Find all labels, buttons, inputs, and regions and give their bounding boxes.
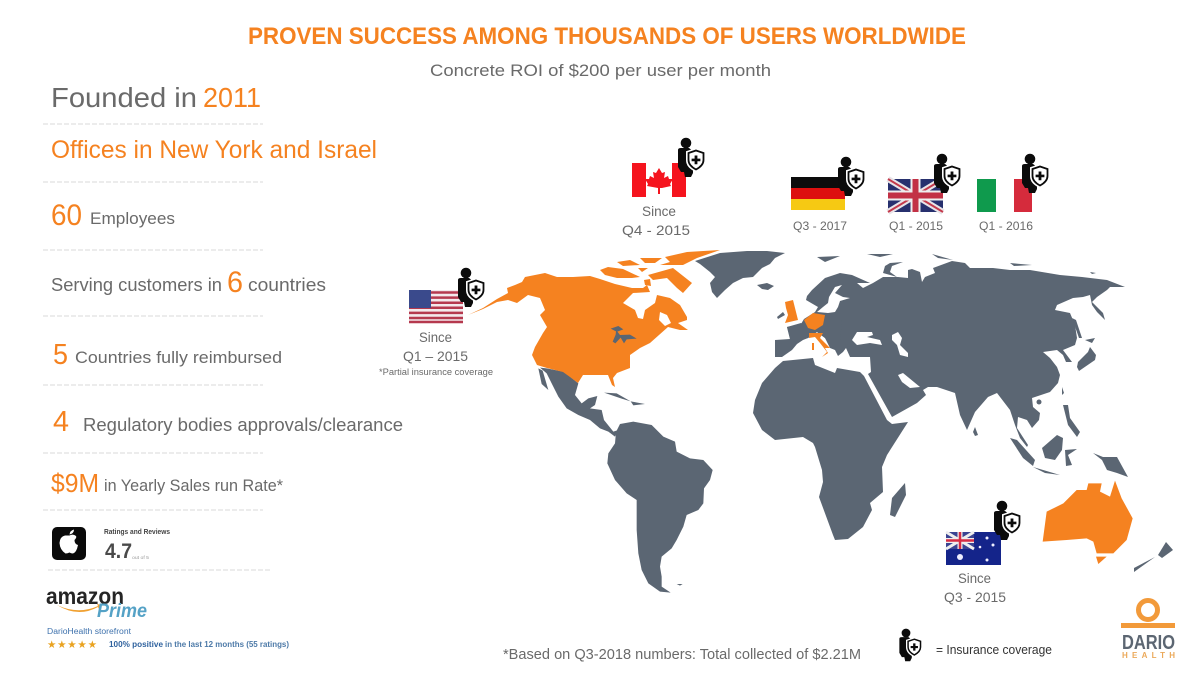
fact: founded year: 2011	[203, 82, 261, 113]
fact: employees label: Employees	[90, 209, 175, 228]
ratings note: in the last 12 months (55 ratings)	[165, 640, 289, 649]
star rating: ★★★★★	[47, 639, 98, 651]
icon: insurance coverage	[934, 154, 961, 193]
map: africa	[753, 358, 908, 540]
label: q1 2015: Q1 - 2015	[889, 219, 943, 233]
flag: australia	[946, 532, 1001, 565]
map: italy (highlighted)	[809, 333, 830, 357]
map: south america	[607, 422, 713, 593]
map: sri lanka and hainan	[973, 400, 1042, 436]
map: usa and canada (highlighted)	[468, 250, 720, 387]
flag: germany	[791, 177, 845, 210]
fact: reimbursed label: Countries fully reimbursed	[75, 348, 282, 367]
prime wordmark: Prime	[97, 601, 147, 622]
map: japan and sakhalin	[1062, 318, 1096, 395]
label: q3 2015: Q3 - 2015	[944, 589, 1006, 605]
fact: offices: Offices in New York and Israel	[51, 136, 377, 164]
flag group: australia	[944, 501, 1021, 605]
flag group: united states	[379, 268, 493, 377]
panel: company facts	[43, 82, 403, 570]
label: since: Since	[419, 329, 452, 345]
map: persian gulf	[898, 373, 920, 388]
logo bar	[1121, 623, 1175, 628]
label: since: Since	[642, 203, 676, 219]
fact: founded: Founded in	[51, 82, 197, 113]
flag group: canada	[622, 138, 705, 238]
fact: reimbursed number: 5	[53, 339, 68, 371]
map: sardinia (highlighted)	[812, 343, 814, 350]
flag group: germany	[791, 157, 865, 233]
fact: employees number: 60	[51, 199, 82, 232]
note: partial insurance coverage: *Partial insurance coverage	[379, 367, 493, 377]
rating value: 4.7	[105, 540, 132, 563]
apple ratings	[52, 527, 170, 563]
flag group: united kingdom	[888, 154, 961, 233]
map: black sea	[852, 332, 882, 345]
legend label: = Insurance coverage	[936, 643, 1052, 657]
icon: insurance coverage	[1022, 154, 1049, 193]
map: baltic sea	[817, 285, 850, 313]
fact: serving customers: Serving customers in	[51, 275, 222, 295]
flag: italy	[977, 179, 1032, 212]
flag: united kingdom	[888, 179, 943, 212]
map: ireland	[777, 312, 785, 319]
icon: insurance coverage	[838, 157, 865, 196]
legend: insurance coverage	[899, 629, 1052, 661]
label: q1 2016: Q1 - 2016	[979, 219, 1033, 233]
amazon smile	[57, 604, 102, 612]
chart: world map	[468, 250, 1173, 593]
map: mexico and central america	[538, 368, 645, 437]
title: PROVEN SUCCESS AMONG THOUSANDS OF USERS WORLDWIDE	[248, 23, 966, 50]
map: arctic islands	[817, 254, 1096, 277]
fact: sales label: in Yearly Sales run Rate*	[104, 476, 283, 495]
positive share: 100% positive	[109, 640, 164, 649]
label: q3 2017: Q3 - 2017	[793, 219, 847, 233]
map: uk (highlighted)	[785, 300, 798, 323]
fact: regulatory label: Regulatory bodies approvals/clearance	[83, 415, 403, 435]
fact: regulatory number: 4	[53, 406, 69, 438]
map: australia (highlighted)	[1043, 481, 1133, 564]
icon: insurance coverage	[678, 138, 705, 177]
fact: sales figure: $9M	[51, 468, 99, 498]
map: philippines	[1063, 405, 1080, 437]
logo wordmark: DARIO	[1122, 632, 1175, 654]
map: greenland and iceland	[695, 251, 785, 298]
rating scale: out of 5	[132, 555, 150, 560]
map: great lakes	[611, 326, 637, 343]
flag group: italy	[977, 154, 1049, 233]
logo subtitle: HEALTH	[1122, 651, 1175, 660]
map: madagascar	[890, 483, 906, 517]
label: q1 2015: Q1 – 2015	[403, 348, 468, 364]
map: caspian sea	[892, 332, 908, 357]
storefront label: DarioHealth storefront	[47, 627, 132, 636]
icon: apple	[52, 527, 86, 560]
icon: insurance coverage	[458, 268, 485, 307]
label: since: Since	[958, 570, 991, 586]
map: eurasia	[775, 254, 1125, 447]
amazon wordmark: amazon	[46, 583, 124, 609]
map: germany (highlighted)	[804, 313, 825, 330]
logo: dario health	[1121, 600, 1175, 660]
fact: country count: 6	[227, 266, 243, 299]
fact: countries label: countries	[248, 275, 326, 295]
flag: united states	[409, 290, 463, 323]
map: france and central europe	[787, 314, 842, 350]
subtitle: Concrete ROI of $200 per user per month	[430, 61, 771, 80]
footnote: *Based on Q3-2018 numbers: Total collected of $2.21M	[503, 646, 861, 663]
flag: canada	[632, 163, 686, 197]
icon: insurance coverage	[899, 629, 922, 661]
amazon prime rating	[46, 583, 289, 651]
logo ring	[1138, 600, 1158, 620]
ratings label: Ratings and Reviews	[104, 529, 170, 536]
label: q4 2015: Q4 - 2015	[622, 222, 690, 238]
map: southeast asia and oceania	[1010, 435, 1173, 572]
icon: insurance coverage	[994, 501, 1021, 540]
